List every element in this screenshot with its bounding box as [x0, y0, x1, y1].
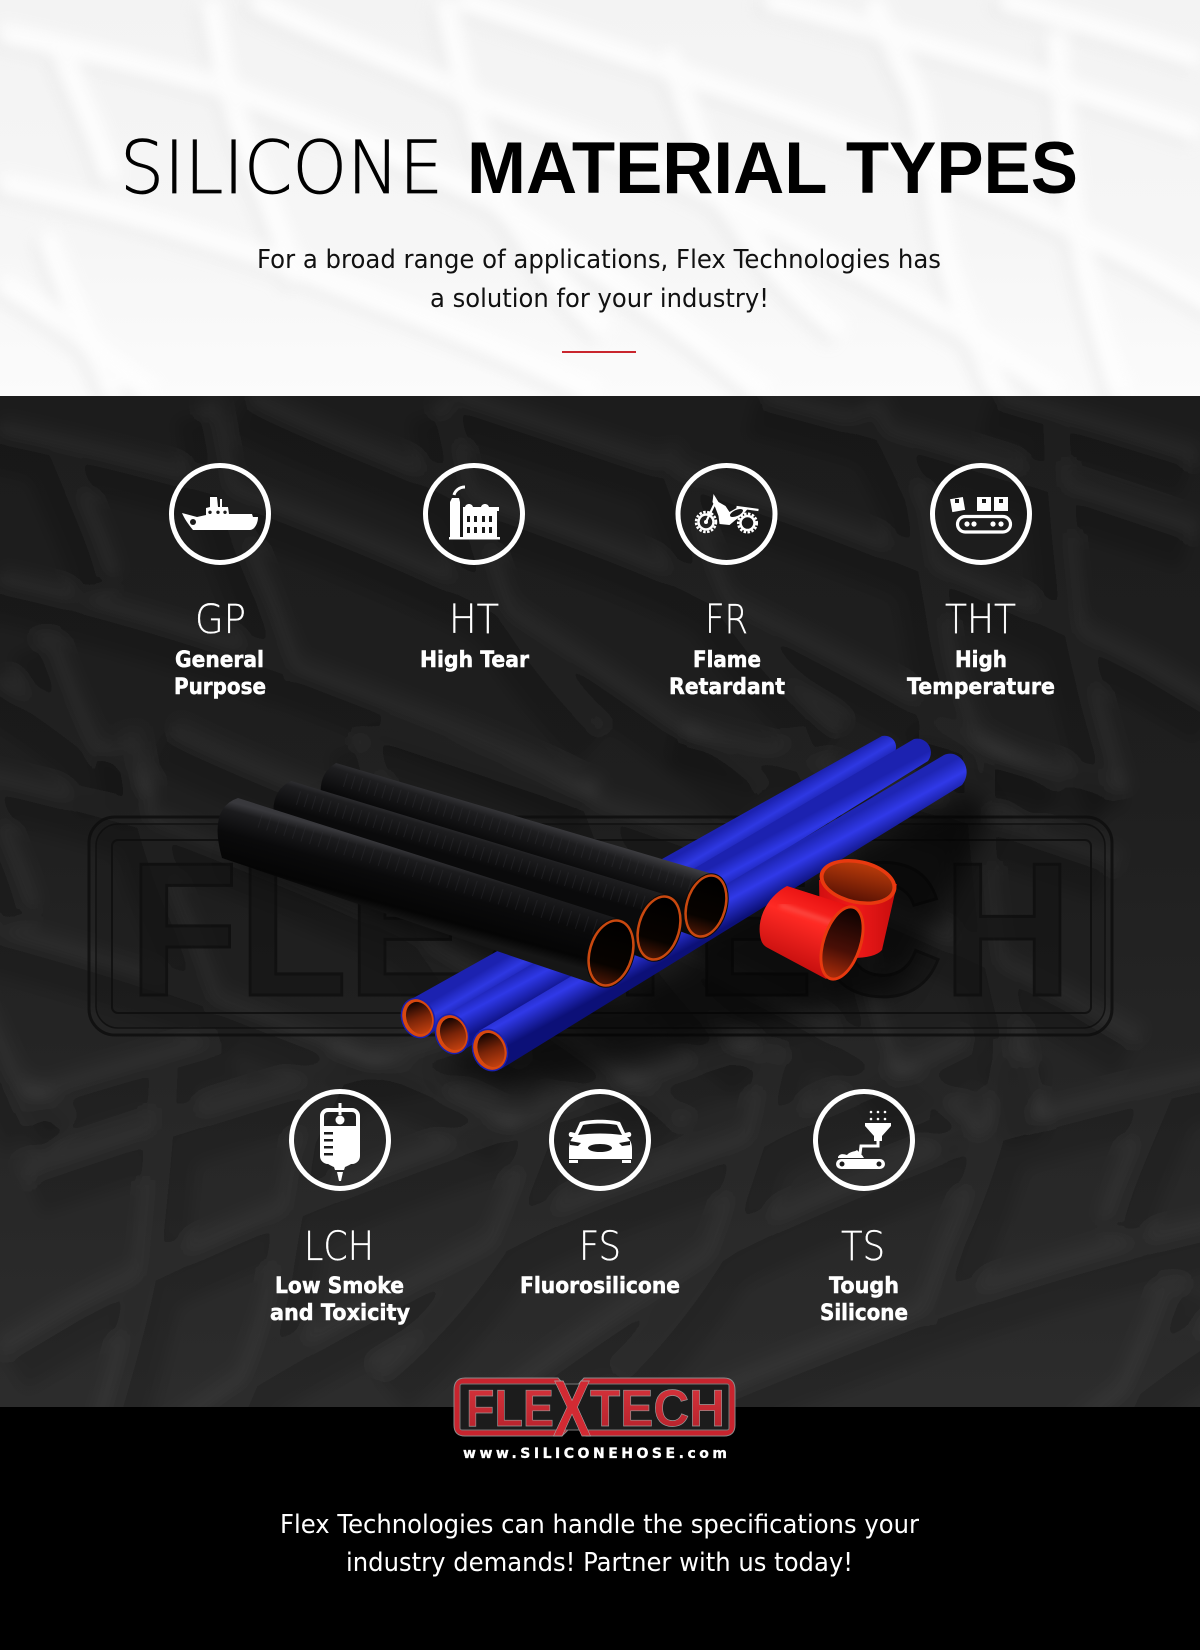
label: FR Flame Retardant — [669, 597, 785, 700]
label: HT High Tear: HT — [449, 597, 499, 643]
icon: car — [552, 1092, 648, 1188]
product photo: silicone hoses — [218, 736, 990, 1090]
label: TS Tough Silicone: TS — [841, 1224, 885, 1270]
label: THT High Temperature — [907, 597, 1055, 700]
icon: motorcycle — [678, 466, 775, 562]
label: GP General Purpose — [174, 597, 266, 700]
label: FS Fluorosilicone — [520, 1224, 680, 1299]
icon: conveyor — [932, 466, 1030, 562]
footer text — [280, 1510, 919, 1578]
title — [120, 126, 1078, 211]
label: TS Tough Silicone: Silicone — [820, 1301, 908, 1326]
label: HT High Tear: High Tear — [420, 648, 529, 673]
label: THT High Temperature: Temperature — [907, 675, 1055, 700]
label: FR Flame Retardant: Retardant — [669, 675, 785, 700]
label: GP General Purpose: General — [175, 648, 264, 673]
label: GP General Purpose: Purpose — [174, 675, 266, 700]
title: SILICONE — [120, 126, 443, 211]
logo: Flextech — [454, 1364, 735, 1462]
logo: Flextech: X — [553, 1364, 591, 1453]
label: LCH Low Smoke and Toxicity: Low Smoke — [275, 1274, 404, 1299]
icon: ship — [172, 466, 268, 562]
label: THT High Temperature: High — [955, 648, 1007, 673]
label: LCH Low Smoke and Toxicity: and Toxicity — [270, 1301, 410, 1326]
intro text: For a broad range of applications, Flex Technologies has — [257, 245, 941, 275]
panel: dark textured section — [0, 396, 1200, 1456]
intro text: a solution for your industry! — [430, 284, 769, 314]
label: TS Tough Silicone — [820, 1224, 908, 1326]
label: FR Flame Retardant: Flame — [693, 648, 761, 673]
blue hoses — [396, 736, 967, 1076]
icon: funnel on conveyor — [816, 1092, 912, 1188]
watermark: Flextech logo: FLEXTECH — [129, 824, 1072, 1036]
intro text — [257, 245, 941, 314]
label: LCH Low Smoke and Toxicity — [270, 1224, 410, 1326]
label: LCH Low Smoke and Toxicity: LCH — [304, 1224, 374, 1270]
label: FS Fluorosilicone: Fluorosilicone — [520, 1274, 680, 1299]
panel: light header background — [0, 0, 1200, 403]
panel: black footer — [0, 1407, 1200, 1650]
label: FR Flame Retardant: FR — [705, 597, 748, 643]
footer text: industry demands! Partner with us today! — [346, 1548, 853, 1578]
logo: Flextech: TECH — [590, 1380, 725, 1438]
icon: IV bag — [292, 1092, 388, 1188]
label: THT High Temperature: THT — [945, 597, 1016, 643]
label: TS Tough Silicone: Tough — [829, 1274, 899, 1299]
footer text: Flex Technologies can handle the specifications your — [280, 1510, 919, 1540]
logo: Flextech: FLE — [466, 1380, 554, 1438]
logo: Flextech: www.SILICONEHOSE.com — [463, 1446, 727, 1462]
label: HT High Tear — [420, 597, 529, 673]
label: GP General Purpose: GP — [195, 597, 246, 643]
black hoses — [218, 763, 735, 993]
red divider — [562, 351, 636, 353]
title: MATERIAL TYPES — [467, 128, 1078, 209]
icon: factory — [426, 466, 522, 562]
red couplers — [760, 852, 901, 986]
label: FS Fluorosilicone: FS — [579, 1224, 621, 1270]
